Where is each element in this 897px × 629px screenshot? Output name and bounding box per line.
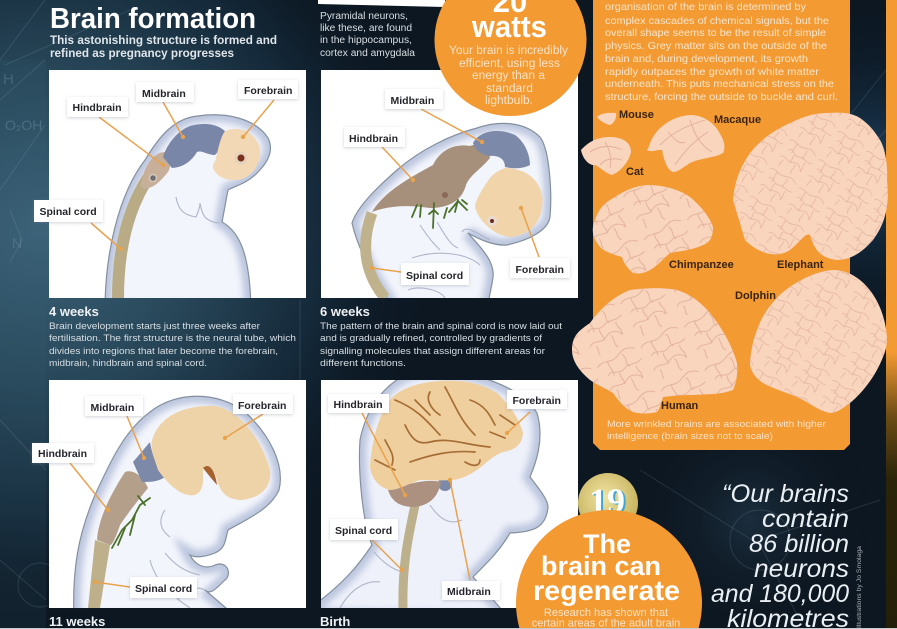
label: Hindbrain: Hindbrain [349, 133, 398, 145]
callout: 20 watts circle: watts [471, 9, 547, 44]
label: human: Human [661, 400, 699, 412]
panel: 6 weeks embryo [321, 70, 578, 310]
text block: pyramidal neurons note: cortex and amygdala [320, 48, 415, 59]
label: Spinal cord [34, 200, 123, 251]
callout: 20 watts circle: Your brain is incredibly [449, 45, 568, 57]
callout: the brain can regenerate: The [583, 529, 631, 559]
label: Forebrain: Forebrain [512, 395, 561, 407]
label: Hindbrain: Hindbrain [38, 448, 87, 460]
label: Midbrain [136, 82, 194, 139]
text block: folding explanation: organisation of the brain is determined by [605, 2, 807, 13]
text block: 6 weeks: 6 weeks [320, 304, 370, 319]
label: Midbrain: Midbrain [90, 402, 134, 414]
text block: 4 weeks: midbrain, hindbrain and spinal cord. [49, 358, 207, 369]
label: Spinal cord [93, 577, 197, 598]
text block: 6 weeks: different functions. [320, 358, 406, 369]
label: elephant: Elephant [777, 259, 824, 271]
panel: birth baby head [321, 380, 578, 608]
callout: 20 watts circle: energy than a [472, 70, 546, 82]
label: Spinal cord: Spinal cord [335, 525, 392, 537]
label: Spinal cord [370, 263, 469, 285]
label: dolphin: Dolphin [735, 290, 776, 302]
text block: folding explanation: rapidly outpaces the growth of white matter [605, 67, 820, 78]
text block: folding explanation: structure, forcing the outside to buckle and curl. [605, 92, 838, 103]
bottom edge line [0, 628, 897, 629]
text block: pyramidal neurons note: in the hippocampus, [320, 35, 412, 46]
background: dark blue molecular texture: O₂OH [5, 117, 42, 133]
text block: pyramidal neurons note [320, 11, 415, 59]
brain: cat [581, 137, 631, 175]
label: Forebrain [505, 390, 567, 435]
callout: 20 watts circle: standard [486, 83, 533, 95]
callout: the brain can regenerate: regenerate [533, 575, 680, 606]
title: Brain formation [50, 3, 256, 35]
quote [711, 480, 849, 629]
text block: folding explanation: underneath. This puts mechanical stress on the [605, 79, 834, 90]
label: Hindbrain [328, 394, 407, 497]
quote: and 180,000 [711, 580, 849, 608]
text block: 6 weeks [320, 304, 562, 369]
text block: folding explanation: overall shape seems to be the result of simple [605, 28, 826, 39]
label: Midbrain: Midbrain [390, 95, 434, 107]
caption: wrinkled brains note [607, 419, 827, 442]
text block: 6 weeks: The pattern of the brain and spinal cord is now laid out [320, 321, 562, 332]
panel: 4 weeks embryo [34, 70, 306, 310]
caption: birth: Birth [320, 614, 350, 629]
callout: the brain can regenerate [516, 510, 702, 629]
text block: 4 weeks: fertilisation. The first structure is the neural tube, which [49, 333, 296, 344]
panel: brain folding comparison [572, 0, 888, 450]
text block: 4 weeks [49, 304, 296, 369]
label: Spinal cord: Spinal cord [135, 583, 192, 595]
caption: wrinkled brains note: More wrinkled brains are associated with higher [607, 419, 827, 430]
callout: 20 watts circle: efficient, using less [459, 58, 560, 70]
label: Forebrain: Forebrain [244, 85, 292, 97]
text block: 6 weeks: signalling molecules that assign different areas for [320, 346, 546, 357]
text block: folding explanation: brain and, during development, its growth [605, 54, 808, 65]
brain: human [572, 288, 737, 414]
label: Hindbrain [32, 443, 110, 512]
illustration credit: Illustrations by Jo Smolaga [856, 546, 863, 628]
label: Forebrain [510, 206, 570, 278]
brain: mouse [597, 113, 616, 125]
label: Spinal cord [330, 519, 404, 572]
right edge orange strip [886, 0, 897, 629]
callout: number 19 badge: 19 [591, 482, 627, 522]
label: mouse: Mouse [619, 109, 654, 121]
label: Forebrain: Forebrain [516, 264, 564, 276]
label: Hindbrain [344, 127, 415, 182]
text block: pyramidal neurons note: Pyramidal neurons, [320, 11, 408, 22]
label: Hindbrain: Hindbrain [72, 102, 122, 114]
background: dark blue molecular texture: N [12, 235, 22, 251]
label: Forebrain [238, 80, 298, 139]
text block: 4 weeks: 4 weeks [49, 304, 99, 319]
label: Hindbrain: Hindbrain [334, 399, 382, 411]
callout: number 19 badge [578, 473, 638, 533]
callout: 20 watts circle: lightbulb. [485, 95, 533, 107]
label: chimpanzee: Chimpanzee [669, 259, 734, 271]
text block: folding explanation: physics. Grey matter sits on the outside of the [605, 41, 827, 52]
callout: 20 watts circle [434, 0, 586, 116]
label: Forebrain [223, 394, 293, 440]
brain: chimpanzee [593, 185, 713, 274]
text block: 4 weeks: divides into regions that later become the forebrain, [49, 346, 278, 357]
text block: folding explanation: complex cascades of chemical signals, but the [605, 16, 829, 27]
subtitle: This astonishing structure is formed and [50, 33, 277, 47]
subtitle: refined as pregnancy progresses [50, 46, 234, 60]
label: Midbrain [442, 478, 500, 600]
text block: folding explanation [605, 2, 838, 103]
label: Spinal cord: Spinal cord [406, 270, 463, 282]
background: dark blue molecular texture: H [3, 71, 14, 88]
label: Spinal cord: Spinal cord [40, 206, 97, 218]
label: Midbrain: Midbrain [447, 586, 491, 598]
label: Forebrain: Forebrain [238, 400, 286, 412]
quote: 86 billion [749, 530, 849, 558]
caption: 11 weeks: 11 weeks [49, 614, 105, 629]
label: Hindbrain [67, 97, 165, 167]
label: cat: Cat [626, 166, 644, 178]
label: Midbrain [85, 396, 146, 460]
callout: the brain can regenerate: brain can [541, 551, 661, 581]
label: macaque: Macaque [714, 114, 761, 126]
subtitle [50, 33, 277, 60]
text block: 6 weeks: and is gradually refined, controlled by gradients of [320, 333, 542, 344]
brain: dolphin [750, 270, 887, 413]
quote: “Our brains [722, 480, 849, 508]
label: Midbrain [385, 89, 484, 144]
text block: pyramidal neurons note: like these, are found [320, 23, 412, 34]
quote: contain [762, 505, 849, 533]
text block: 4 weeks: Brain development starts just three weeks after [49, 321, 261, 332]
quote: neurons [754, 555, 849, 583]
caption: wrinkled brains note: intelligence (brain sizes not to scale) [607, 431, 773, 442]
callout: number 19 badge: 19 [589, 481, 625, 521]
callout: the brain can regenerate: Research has shown that [544, 607, 668, 619]
panel: 11 weeks embryo [32, 380, 306, 620]
brain: elephant [733, 113, 888, 260]
brain: macaque [647, 115, 724, 172]
top white sliver of previous panel [318, 0, 445, 7]
label: Midbrain: Midbrain [142, 88, 186, 100]
